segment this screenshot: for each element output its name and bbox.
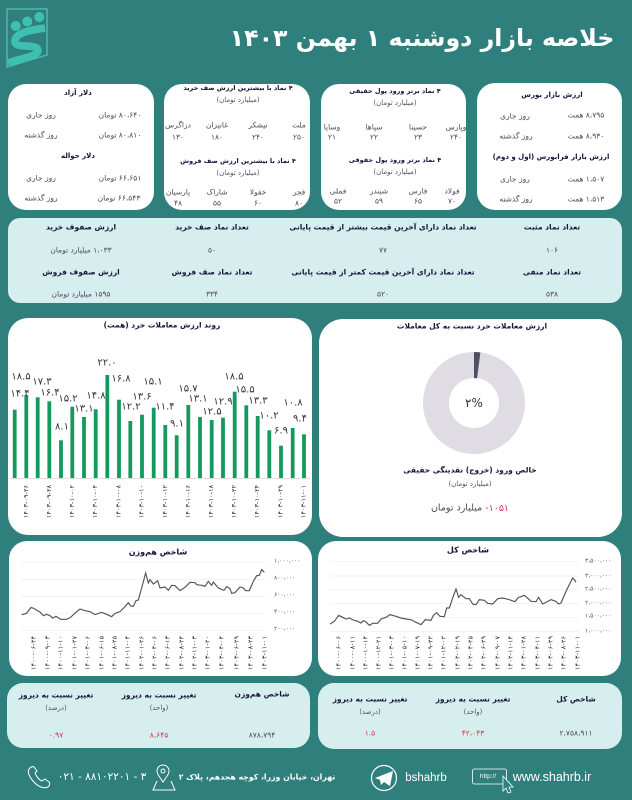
bar date labels: ۱۴۰۳-۱۰-۲۲	[231, 484, 238, 518]
donut chart	[436, 352, 512, 441]
column: positive / negative symbols	[523, 222, 581, 298]
panel: top queue values	[164, 84, 310, 210]
y axis labels: ۲،۵۰۰،۰۰۰	[585, 586, 611, 592]
column: percent change	[332, 694, 408, 738]
sell queue symbols: خفولا	[250, 188, 267, 196]
website: www.shahrb.ir	[512, 770, 591, 784]
bar value labels: ۱۸.۵	[224, 372, 244, 382]
bar value labels: ۱۵.۷	[178, 384, 198, 394]
panel: dollar rates	[8, 84, 154, 210]
bar value labels: ۱۰.۲	[259, 410, 279, 422]
x axis date labels: ۱۴۰۰-۱۱-۱۰	[58, 636, 64, 670]
remittance dollar previous	[24, 194, 140, 202]
x axis date labels: ۱۴۰۰-۱۰-۱۴	[362, 636, 370, 670]
panel: top money inflow	[321, 84, 467, 210]
column: index value: شاخص هم‌وزن	[235, 690, 289, 698]
x axis date labels: ۱۴۰۳-۱۱-۰۱	[574, 636, 582, 670]
chart title: شاخص هم‌وزن	[129, 548, 187, 558]
legal money symbols: فارس	[409, 186, 428, 196]
sell queue symbols: ۴۸	[174, 198, 182, 208]
column: queue counts: ۳۳۴	[206, 290, 218, 298]
panel: market value	[477, 83, 622, 210]
legal money symbols	[330, 186, 460, 206]
x axis date labels: ۱۴۰۲-۰۲-۱۹	[454, 635, 462, 670]
remittance dollar current	[26, 174, 141, 182]
y axis labels: ۱،۰۰۰،۰۰۰	[274, 558, 300, 564]
bourse previous	[499, 132, 604, 140]
bourse previous: ۸،۹۳۰ همت	[568, 132, 604, 140]
heading: farabourse value: ارزش بازار فرابورس (اول و دوم)	[493, 153, 609, 161]
column: unit change: ۴۲،۰۴۳	[462, 728, 484, 738]
address: تهران، خیابان وزرا، کوچه هجدهم، پلاک ۲	[179, 772, 335, 782]
x axis date labels: ۱۴۰۰-۰۹-۰۳	[44, 635, 52, 670]
logo	[7, 9, 47, 67]
x axis date labels: ۱۴۰۱-۰۷-۱۹	[414, 635, 422, 670]
column: queue counts: ۵۰	[208, 246, 216, 254]
legal money symbols: ۵۲	[334, 196, 342, 206]
farabourse previous	[499, 194, 604, 204]
chart title: روند ارزش معاملات خرد (همت)	[104, 320, 220, 330]
bar date labels: ۱۴۰۳-۱۰-۰۴	[92, 485, 99, 518]
heading: top sell queue: ۴ نماد با بیشترین ارزش صف فروش	[180, 157, 296, 165]
column: index value: ۲،۷۵۸،۹۱۱	[559, 728, 593, 738]
legal money symbols: ۶۵	[414, 196, 422, 206]
y axis labels: ۶۰۰،۰۰۰	[274, 592, 295, 598]
sell queue symbols: ۶۰	[254, 198, 262, 208]
x axis date labels: ۱۴۰۲-۰۴-۲۵	[468, 635, 474, 670]
remittance dollar previous: ۶۶،۵۴۳ تومان	[98, 194, 140, 202]
unit: (میلیارد تومان)	[373, 99, 417, 107]
x axis date labels: ۱۴۰۰-۰۸-۱۱	[350, 636, 356, 670]
x axis date labels: ۱۴۰۰-۱۲-۲۱	[376, 636, 382, 670]
bar value labels: ۱۶.۸	[111, 374, 131, 384]
icon: telegram	[372, 766, 396, 790]
x axis date labels: ۱۴۰۱-۱۲-۰۲	[440, 635, 448, 670]
x axis date labels: ۱۴۰۳-۰۱-۲۸	[520, 635, 528, 670]
x axis date labels: ۱۴۰۳-۰۶-۲۹	[548, 635, 554, 670]
heading: real money: ۴ نماد برتر ورود پول حقیقی	[349, 87, 441, 95]
line chart	[21, 562, 265, 630]
heading: bourse value: ارزش بازار بورس	[521, 91, 583, 99]
sell queue symbols: پارسیان	[166, 188, 190, 196]
column: index value	[235, 690, 289, 740]
legal money symbols: ۷۰	[448, 196, 456, 206]
legal money symbols: شبندر	[369, 186, 388, 196]
bar value labels: ۱۳.۳	[248, 396, 268, 406]
x axis date labels: ۱۴۰۲-۰۶-۱۳	[164, 635, 172, 670]
farabourse current	[500, 174, 604, 184]
bourse current	[500, 110, 604, 120]
x axis date labels: ۱۴۰۱-۱۱-۰۴	[124, 636, 132, 670]
column: queue values: ارزش صفوف فروش	[42, 268, 120, 276]
x axis date labels: ۱۴۰۰-۰۶-۲۴	[30, 636, 38, 670]
real money symbols: وپارس	[446, 122, 467, 132]
free dollar current	[26, 110, 141, 120]
buy queue symbols: ۲۴۰	[252, 132, 264, 142]
bourse current: روز جاری	[500, 112, 530, 120]
column: positive / negative symbols: تعداد نماد مثبت	[524, 222, 580, 232]
panel: equal-weight index chart	[9, 541, 312, 676]
farabourse current: ۱،۵۰۷ همت	[568, 174, 604, 184]
x axis date labels: ۱۴۰۳-۰۴-۰۴	[218, 636, 226, 670]
x axis date labels: ۱۴۰۰-۰۶-۰۶	[336, 636, 342, 670]
real money symbols: حسینا	[409, 122, 427, 132]
x axis date labels: ۱۴۰۳-۰۸-۲۶	[560, 636, 568, 670]
y axis labels: ۴۰۰،۰۰۰	[274, 608, 295, 616]
unit: (میلیارد تومان)	[216, 169, 260, 177]
bar value labels: ۱۷.۳	[32, 376, 52, 388]
y axis labels	[274, 558, 300, 632]
column: queue values: ۱،۰۳۳ میلیارد تومان	[50, 246, 112, 254]
column: last price vs closing: تعداد نماد دارای آخرین قیمت کمتر از قیمت پایانی	[291, 266, 475, 276]
column: unit change: (واحد)	[464, 708, 483, 716]
icon: phone	[28, 767, 50, 788]
column: unit change	[435, 694, 511, 738]
remittance dollar current: ۶۶،۶۵۱ تومان	[99, 174, 141, 182]
x axis date labels: ۱۴۰۲-۰۱-۲۶	[138, 636, 146, 670]
bar value labels: ۱۳.۱	[74, 404, 94, 414]
column: index value: ۸۷۸،۷۹۴	[249, 730, 275, 740]
bar value labels: ۱۶.۴	[40, 388, 60, 398]
buy queue symbols: ۱۸۰	[211, 132, 223, 142]
bar date labels: ۱۴۰۳-۱۰-۱۲	[162, 484, 169, 518]
x axis date labels: ۱۴۰۲-۱۱-۰۳	[192, 635, 198, 670]
x axis date labels: ۱۴۰۳-۰۱-۲۰	[204, 636, 212, 670]
x axis date labels: ۱۴۰۱-۰۶-۱۵	[98, 635, 106, 670]
sell queue symbols: فجر	[292, 188, 306, 196]
buy queue symbols: ۱۳۰	[172, 132, 184, 142]
real money symbols: سپاها	[365, 122, 383, 132]
bar date labels: ۱۴۰۳-۱۱-۰۱	[300, 485, 308, 518]
panel: equal-weight index summary	[7, 683, 310, 748]
column: positive / negative symbols: ۵۳۸	[546, 290, 558, 298]
net liquidity unit: (میلیارد تومان)	[448, 480, 492, 488]
column: unit change: (واحد)	[150, 704, 169, 712]
bar chart	[10, 375, 310, 479]
sell queue symbols: شاراک	[206, 188, 228, 196]
bar value labels: ۱۵.۵	[235, 384, 255, 396]
x axis date labels: ۱۴۰۱-۰۳-۰۳	[388, 635, 396, 670]
real money symbols: ۲۳	[414, 132, 422, 142]
remittance dollar previous: روز گذشته	[24, 194, 58, 202]
buy queue symbols: ملت	[292, 120, 306, 130]
bar value labels: ۸.۱	[55, 422, 69, 432]
column: percent change: تغییر نسبت به دیروز	[18, 690, 94, 700]
column: index value	[556, 694, 596, 738]
free dollar previous	[24, 130, 141, 140]
bar value labels: ۱۳.۱	[188, 394, 208, 404]
real money symbols: ۲۲	[370, 132, 378, 142]
bar value labels: ۲۲.۰	[97, 358, 117, 368]
column: queue values	[42, 222, 120, 298]
buy queue symbols: غانیزان	[206, 120, 228, 130]
bar date labels: ۱۴۰۳-۰۹-۲۸	[46, 484, 53, 518]
panel: retail trade trend chart	[8, 318, 312, 535]
x axis date labels: ۱۴۰۲-۰۶-۲۹	[480, 635, 488, 670]
bar value labels: ۹.۱	[170, 418, 184, 430]
panel: total index summary	[318, 683, 622, 749]
donut title: ارزش معاملات خرد نسبت به کل معاملات	[397, 322, 547, 330]
bar value labels: ۱۲.۲	[121, 402, 141, 412]
bar date labels: ۱۴۰۳-۱۰-۱۸	[208, 484, 215, 518]
free dollar current: ۸۰،۶۴۰ تومان	[99, 110, 141, 120]
column: last price vs closing: تعداد نماد دارای آخرین قیمت بیشتر از قیمت پایانی	[289, 222, 477, 232]
column: last price vs closing: ۷۷	[379, 246, 387, 254]
x axis date labels: ۱۴۰۲-۰۸-۲۴	[178, 636, 186, 670]
bar date labels: ۱۴۰۳-۱۰-۰۲	[69, 484, 76, 518]
x axis date labels	[30, 635, 268, 670]
bar date labels	[23, 484, 308, 518]
y axis labels	[585, 558, 611, 634]
bar value labels	[10, 358, 307, 436]
column: positive / negative symbols: تعداد نماد منفی	[523, 268, 581, 276]
column: unit change: تغییر نسبت به دیروز	[435, 694, 511, 704]
x axis date labels: ۱۴۰۱-۰۵-۱۰	[402, 636, 408, 670]
donut percent: ۲%	[465, 396, 483, 410]
panel: total index chart	[318, 541, 621, 676]
column: unit change	[121, 690, 197, 740]
heading: free dollar: دلار آزاد	[64, 88, 92, 97]
column: queue values: ارزش صفوف خرید	[46, 222, 116, 232]
x axis date labels: ۱۴۰۳-۰۴-۱۱	[534, 636, 542, 670]
column: queue counts: تعداد نماد صف خرید	[175, 222, 249, 232]
icon: web link cursor: http://	[480, 773, 496, 780]
remittance dollar current: روز جاری	[26, 174, 56, 182]
y axis labels: ۸۰۰،۰۰۰	[274, 574, 295, 582]
line chart	[330, 562, 579, 631]
x axis date labels: ۱۴۰۱-۰۹-۲۲	[428, 635, 434, 670]
icon: map pin	[153, 765, 175, 790]
x axis date labels: ۱۴۰۳-۰۶-۲۹	[234, 635, 240, 670]
free dollar previous: روز گذشته	[24, 130, 58, 140]
heading: remittance dollar: دلار حواله	[61, 152, 95, 160]
sell queue symbols	[166, 188, 306, 208]
real money symbols: وسایا	[324, 122, 341, 132]
real money symbols: ۲۱	[328, 132, 336, 142]
free dollar previous: ۸۰،۸۱۰ تومان	[99, 130, 141, 140]
y axis labels: ۳،۰۰۰،۰۰۰	[585, 572, 611, 580]
column: percent change	[18, 690, 94, 740]
telegram handle: bshahrb	[405, 772, 447, 784]
x axis date labels	[336, 635, 582, 670]
heading: legal money: ۴ نماد برتر ورود پول حقوقی	[349, 156, 441, 164]
bar value labels: ۱۱.۴	[155, 402, 175, 412]
buy queue symbols: ۲۵۰	[293, 132, 305, 142]
x axis date labels: ۱۴۰۳-۱۱-۰۱	[262, 636, 268, 670]
column: percent change: ۰.۹۷	[49, 730, 63, 740]
icon: web link cursor	[472, 769, 513, 793]
y axis labels: ۲،۰۰۰،۰۰۰	[585, 600, 611, 606]
bar value labels: ۱۰.۸	[283, 398, 303, 408]
y axis labels: ۱،۰۰۰،۰۰۰	[585, 628, 611, 634]
x axis date labels: ۱۴۰۲-۱۱-۱۴	[508, 636, 514, 670]
column: percent change: ۱.۵	[365, 728, 375, 738]
column: unit change: ۸،۶۴۵	[150, 730, 168, 740]
y axis labels: ۱،۵۰۰،۰۰۰	[585, 612, 611, 620]
column: percent change: (درصد)	[359, 708, 381, 716]
title: خلاصه بازار دوشنبه ۱ بهمن ۱۴۰۳	[230, 24, 614, 52]
bar value labels: ۱۴.۸	[86, 390, 106, 402]
unit: (میلیارد تومان)	[216, 96, 260, 104]
column: percent change: تغییر نسبت به دیروز	[332, 694, 408, 704]
buy queue symbols: دزاگرس	[165, 120, 191, 130]
x axis date labels: ۱۴۰۱-۰۱-۲۷	[72, 635, 78, 670]
bar date labels: ۱۴۰۳-۱۰-۱۰	[138, 485, 146, 518]
bar date labels: ۱۴۰۳-۱۰-۲۹	[278, 484, 284, 518]
bourse current: ۸،۷۹۵ همت	[568, 110, 604, 120]
bar date labels: ۱۴۰۳-۱۰-۱۶	[185, 485, 192, 518]
bar value labels: ۱۳.۶	[132, 392, 152, 402]
free dollar current: روز جاری	[26, 110, 56, 120]
real money symbols: ۲۴۰	[450, 132, 462, 142]
unit: (میلیارد تومان)	[373, 168, 417, 176]
bar date labels: ۱۴۰۳-۱۰-۲۴	[254, 485, 261, 518]
sell queue symbols: ۵۵	[213, 198, 221, 208]
real money symbols	[324, 122, 467, 142]
panel: market stats	[8, 218, 622, 303]
x axis date labels: ۱۴۰۲-۰۹-۰۷	[494, 635, 502, 670]
column: index value: شاخص کل	[556, 694, 596, 704]
y axis labels: ۲۰۰،۰۰۰	[274, 626, 295, 632]
column: queue counts: تعداد نماد صف فروش	[172, 268, 253, 276]
bar value labels: ۱۵.۲	[58, 394, 78, 404]
column: unit change: تغییر نسبت به دیروز	[121, 690, 197, 700]
bar value labels: ۶.۹	[274, 426, 288, 436]
net liquidity value: ۱۰۵۱- میلیارد تومان	[431, 502, 509, 514]
sell queue symbols: ۸۰	[295, 198, 303, 208]
bar value labels: ۱۴.۴	[10, 388, 30, 400]
buy queue symbols	[165, 120, 306, 142]
panel: retail share donut	[319, 319, 622, 537]
y axis labels: ۳،۵۰۰،۰۰۰	[585, 558, 611, 564]
bar value labels: ۹.۴	[293, 414, 307, 424]
bar value labels: ۱۵.۱	[143, 376, 163, 388]
farabourse previous: روز گذشته	[499, 194, 533, 204]
x axis date labels: ۱۴۰۲-۰۴-۰۶	[152, 636, 158, 670]
heading: top buy queue: ۴ نماد با بیشترین ارزش صف خرید	[183, 84, 293, 92]
bar value labels: ۱۲.۹	[213, 396, 233, 408]
legal money symbols: فملی	[330, 186, 347, 196]
column: queue counts	[172, 222, 253, 298]
column: queue values: ۱۵۹۵ میلیارد تومان	[52, 290, 110, 298]
chart title: شاخص کل	[447, 546, 489, 556]
column: last price vs closing	[289, 222, 477, 298]
x axis date labels: ۱۴۰۳-۰۸-۲۳	[248, 635, 254, 670]
net liquidity heading: خالص ورود (خروج) نقدینگی حقیقی	[403, 466, 537, 474]
x axis date labels: ۱۴۰۱-۰۴-۰۶	[84, 636, 92, 670]
column: positive / negative symbols: ۱۰۶	[546, 246, 558, 254]
farabourse previous: ۱،۵۱۳ همت	[568, 194, 604, 204]
legal money symbols: فولاد	[444, 186, 460, 196]
bourse previous: روز گذشته	[499, 132, 533, 140]
column: percent change: (درصد)	[45, 704, 67, 712]
phone number: ۰۲۱ - ۸۸۱۰۲۲۰۱ - ۳	[58, 771, 147, 783]
x axis date labels: ۱۴۰۱-۰۸-۲۵	[112, 635, 118, 670]
farabourse current: روز جاری	[500, 174, 530, 184]
legal money symbols: ۵۹	[375, 196, 383, 206]
column: last price vs closing: ۵۲۰	[377, 290, 389, 298]
bar value labels: ۱۲.۵	[202, 406, 222, 418]
buy queue symbols: نیشکر	[247, 120, 268, 130]
bar date labels: ۱۴۰۳-۱۰-۰۸	[116, 484, 122, 518]
bar value labels: ۱۸.۵	[11, 372, 31, 382]
bar date labels: ۱۴۰۳-۰۹-۲۶	[23, 485, 30, 518]
